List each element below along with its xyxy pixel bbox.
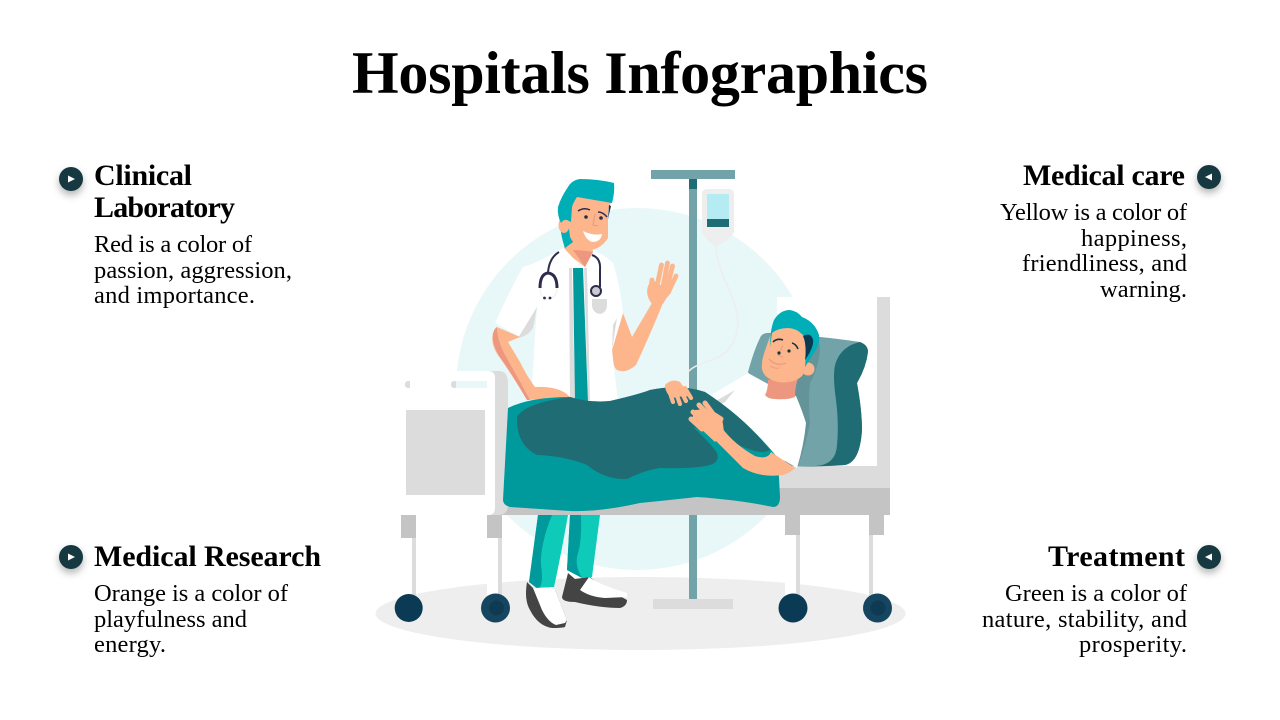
doctor coat xyxy=(495,247,623,402)
heading: medical care: Medical care xyxy=(1023,159,1185,192)
doctor waving hand xyxy=(647,263,676,304)
panel: treatment xyxy=(982,540,1221,658)
doctor face xyxy=(568,192,612,250)
doctor tie xyxy=(573,268,588,402)
patient upper hand xyxy=(665,381,691,404)
patient neck xyxy=(765,376,799,399)
icon: left bullet xyxy=(59,545,83,569)
doctor neck xyxy=(564,240,593,267)
footboard xyxy=(404,371,508,515)
heading: medical research: Medical Research xyxy=(94,540,321,573)
patient forearm xyxy=(713,428,795,476)
text block: orange: energy. xyxy=(94,631,166,658)
text block: red: and importance. xyxy=(94,282,255,309)
doctor features xyxy=(578,209,607,217)
heading: treatment: Treatment xyxy=(1048,540,1185,573)
doctor ear xyxy=(558,217,570,233)
text block: orange xyxy=(94,580,289,658)
patient ear xyxy=(802,362,814,376)
icon: left bullet xyxy=(59,167,83,191)
doctor hair xyxy=(558,179,614,223)
coat pocket xyxy=(592,299,607,314)
bed frame xyxy=(401,297,890,602)
panel: clinical laboratory xyxy=(59,159,292,309)
doctor legs and shoes xyxy=(526,515,627,628)
text block: green xyxy=(982,580,1188,658)
patient arm and hands xyxy=(665,381,795,476)
doctor left arm xyxy=(492,327,570,400)
iv stand xyxy=(651,170,738,609)
blanket xyxy=(503,387,780,511)
text block: orange: Orange is a color of xyxy=(94,580,289,607)
background circle xyxy=(456,208,818,570)
heading: clinical laboratory xyxy=(94,159,235,224)
patient face xyxy=(762,322,808,383)
panel: medical research xyxy=(59,540,321,658)
text block: red xyxy=(94,231,292,309)
text block: yellow: warning. xyxy=(1100,276,1187,303)
patient lower hand xyxy=(691,403,724,442)
bed wheels xyxy=(395,594,892,622)
patient features xyxy=(773,339,798,349)
text block: yellow xyxy=(1000,199,1188,303)
text block: green: nature, stability, and xyxy=(982,606,1187,633)
doctor waving arm xyxy=(612,303,663,371)
text block: yellow: Yellow is a color of xyxy=(1000,199,1188,226)
doctor back hair xyxy=(559,205,573,248)
text block: green: Green is a color of xyxy=(1005,580,1188,607)
blanket dark fold xyxy=(517,387,770,479)
floor shadow xyxy=(376,577,906,650)
text block: yellow: friendliness, and xyxy=(1022,250,1187,277)
heading: clinical laboratory: Clinical xyxy=(94,159,192,192)
text block: red: passion, aggression, xyxy=(94,257,292,284)
patient hair xyxy=(770,310,819,367)
text block: yellow: happiness, xyxy=(1081,225,1187,252)
illustration: doctor and patient xyxy=(376,170,906,650)
text block: green: prosperity. xyxy=(1079,631,1187,658)
text block: orange: playfulness and xyxy=(94,606,247,633)
title: Hospitals Infographics xyxy=(352,40,928,106)
pillow xyxy=(748,333,868,466)
stethoscope xyxy=(540,252,600,288)
icon: right bullet xyxy=(1197,165,1221,189)
icon: right bullet xyxy=(1197,545,1221,569)
text block: red: Red is a color of xyxy=(94,231,253,258)
panel: medical care xyxy=(1000,159,1221,303)
patient xyxy=(710,310,819,468)
doctor upper body xyxy=(492,179,676,402)
heading: clinical laboratory: Laboratory xyxy=(94,191,235,224)
patient shirt xyxy=(710,373,806,468)
